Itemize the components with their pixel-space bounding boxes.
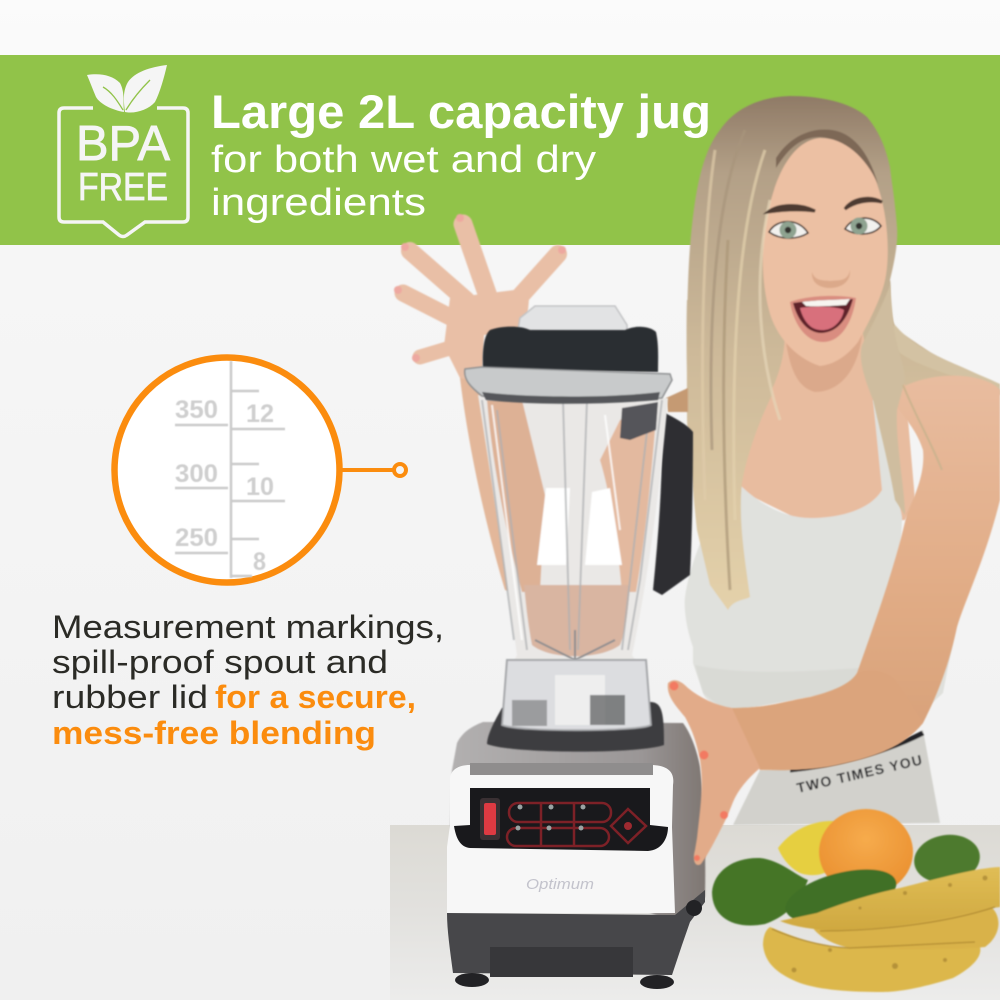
right hair falling forward [861,285,905,515]
blender [447,306,705,989]
bright window right [585,488,622,565]
measurement numbers: 350 [175,396,218,424]
leaves [87,65,167,113]
right eye [845,218,881,234]
upper arm and forearm [730,376,1000,770]
waistband stripe [790,733,923,770]
rubber lid [483,327,658,372]
bright window left [537,488,570,565]
panel buttons [507,803,646,846]
tank top back fragment [920,620,957,708]
callout text: for a secure, [215,679,416,715]
banana speckles [792,876,988,972]
measurement numbers: 250 [175,524,218,552]
measurement numbers: 12 [246,400,274,428]
measurement numbers: 10 [246,473,274,501]
hair strands over tank [687,300,772,610]
blade lines [535,630,615,665]
left eyebrow [768,205,815,212]
lemon [778,821,853,875]
lower hand [668,680,760,865]
fingernails [670,682,728,861]
BPA text: BPA [76,117,170,171]
jug rim [465,367,672,404]
left eye [769,222,808,238]
motor housing top [450,722,705,925]
tank top hem [695,665,860,712]
inner grip [620,402,658,440]
avocado left [712,858,808,926]
heading line 1: Large 2L capacity jug [211,85,711,138]
raised hand and forearm [394,214,566,600]
heading line 3: ingredients [211,182,426,224]
collar [487,702,664,752]
banana middle [813,906,998,949]
measurement numbers [175,396,274,576]
right eyebrow [845,198,882,209]
hand [394,214,566,382]
callout text [52,609,444,751]
right arm [668,285,1000,865]
fingernails [394,214,566,362]
base [447,890,705,975]
woman [685,96,1000,825]
banana lower [763,927,980,992]
table top [390,825,1000,1000]
skin seen through jug left [487,400,545,592]
brand script: Optimum [526,876,594,893]
callout text: mess-free blending [52,715,376,751]
elbow crease shading [730,670,923,770]
badge outline [59,108,188,236]
white body [447,765,675,913]
left hair strand lines [702,130,780,590]
control panel [454,788,668,851]
circle [114,358,340,582]
base notch [490,947,633,977]
skin seen through jug right [600,405,657,592]
neck and chest skin [735,330,915,525]
callout text: rubber lid [52,679,208,715]
waistband text: TWO TIMES YOU [795,752,923,796]
jug ribs [482,400,662,650]
avocado right [911,831,983,887]
handle [653,412,693,595]
power switch [480,798,500,840]
hair shadow at parting [776,129,878,184]
blade base [502,660,651,730]
contents tint [524,585,630,656]
callout text: Measurement markings, [52,609,444,645]
heading [211,85,711,224]
mouth [793,299,853,333]
callout text: spill-proof spout and [52,644,388,680]
measurement marks [175,361,285,578]
BPA free badge [59,65,188,236]
measurement numbers: 300 [175,460,218,488]
nose shadow [812,270,850,288]
hair back [687,96,1000,610]
green banner [0,55,1000,245]
teeth [802,299,850,306]
orange [819,809,913,895]
banana seams [772,907,995,948]
avocado centre [780,859,902,933]
heading line 2: for both wet and dry [211,139,596,181]
connector line and dot [340,464,406,476]
jug body [478,395,668,680]
top strip [470,763,653,775]
neck shadow [785,335,862,392]
shoulder strand [880,325,1000,390]
button indicator dots [516,804,586,830]
lid cap [518,306,627,335]
tongue [800,307,844,330]
leggings [733,730,940,825]
FREE text: FREE [78,166,168,209]
callout: measurement zoom circle [114,358,406,582]
feet [455,900,702,989]
shoulder behind jug [666,388,688,412]
forearm [460,365,560,600]
fruit group [712,809,1000,992]
face [763,138,888,366]
lips [790,296,856,342]
fine hair over shoulder [903,385,942,470]
measurement numbers: 8 [253,548,266,576]
banana top [780,867,1000,930]
tank top [685,400,902,712]
